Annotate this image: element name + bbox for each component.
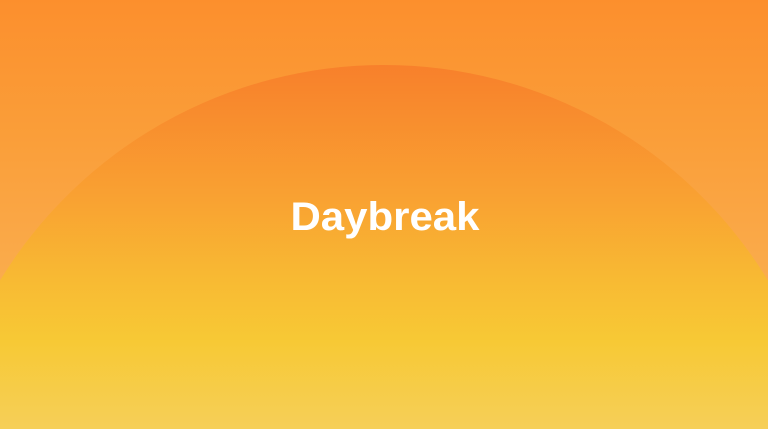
title: Daybreak	[290, 195, 480, 239]
